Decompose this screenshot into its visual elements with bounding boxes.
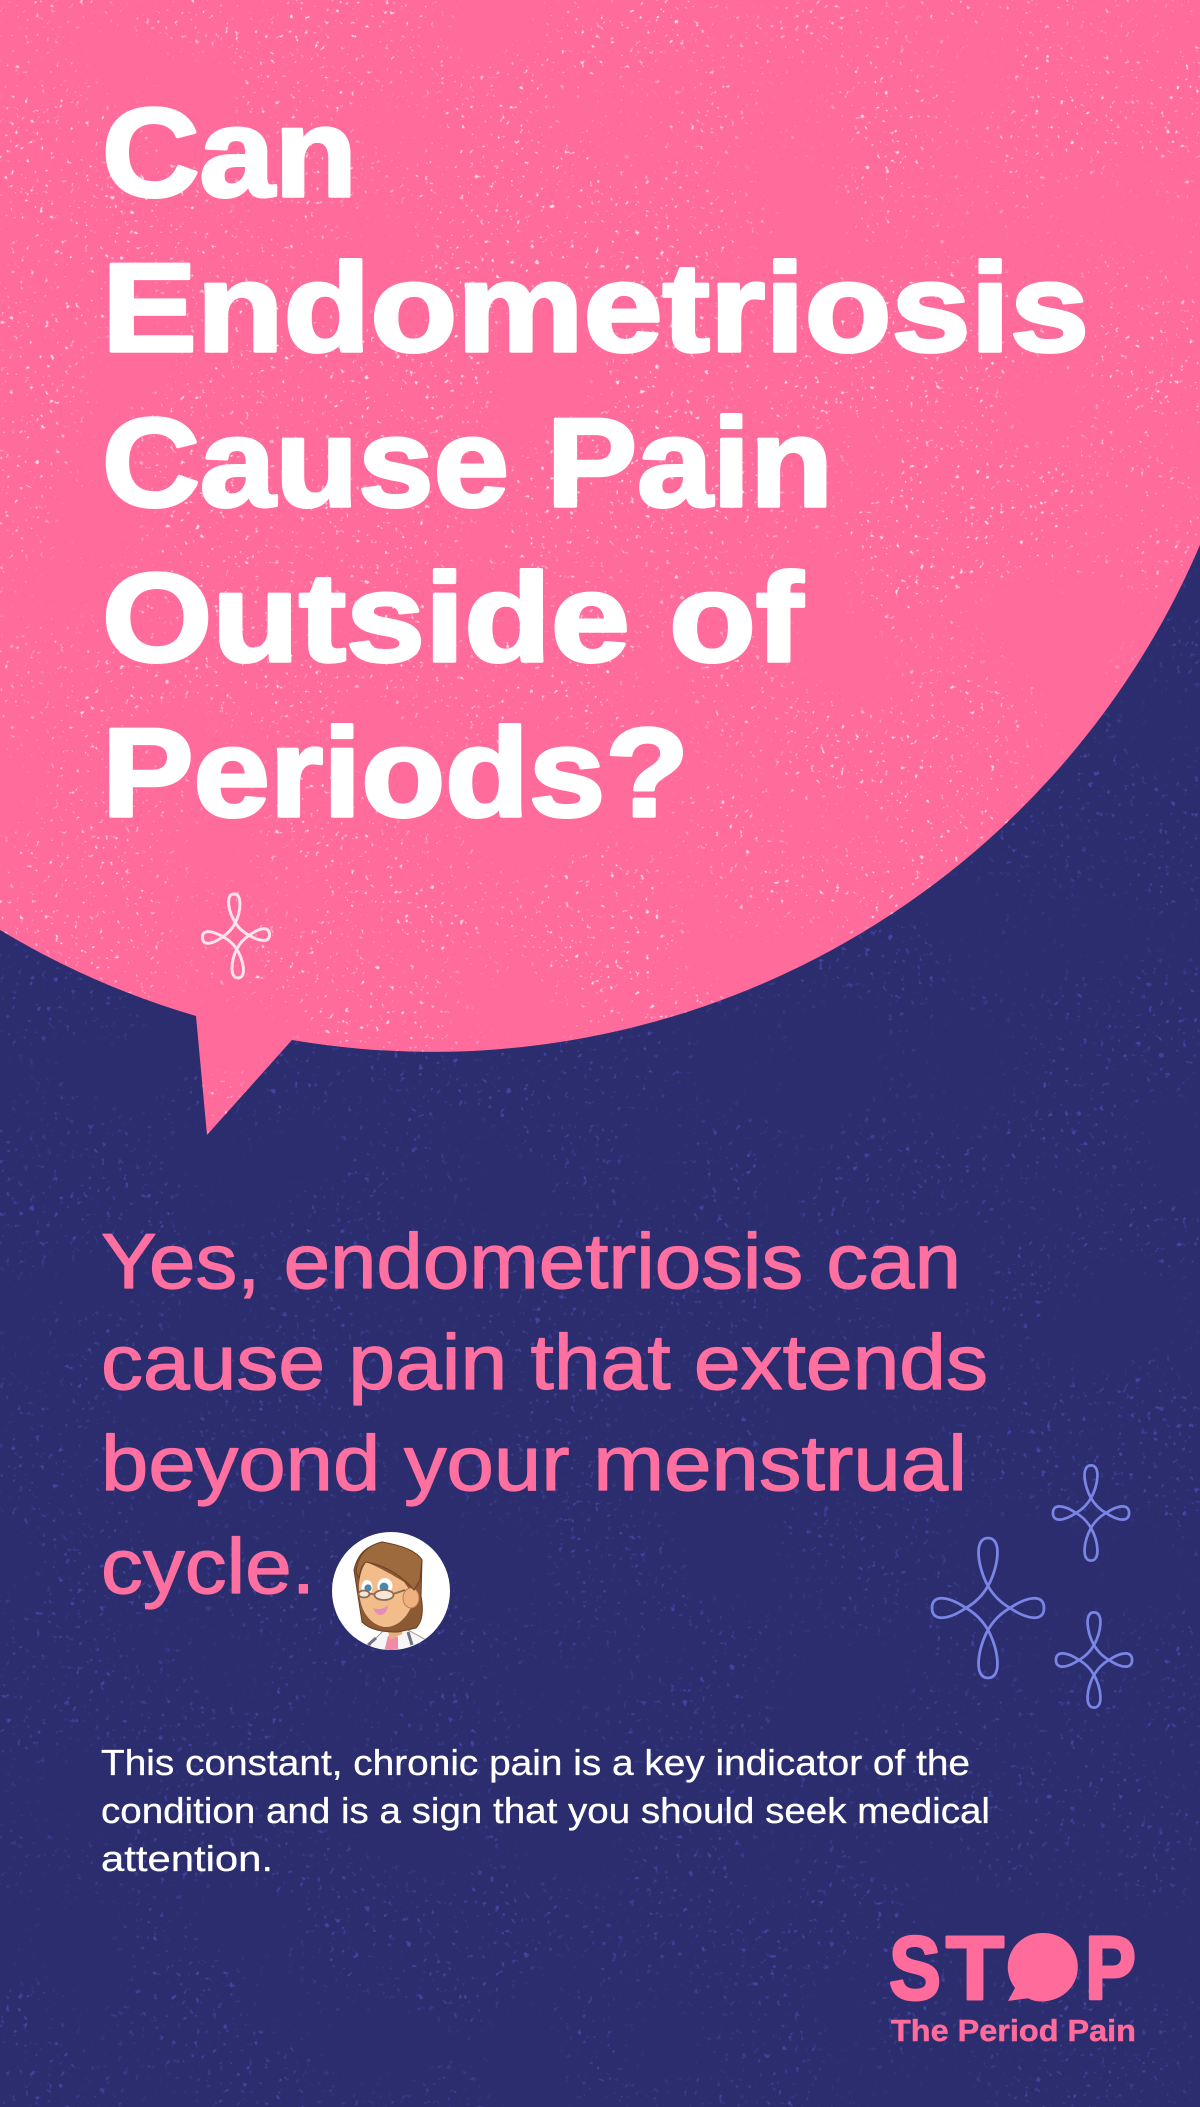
ear — [403, 1588, 419, 1608]
logo: Stop The Period Pain: P — [1085, 1919, 1136, 2019]
logo: Stop The Period Pain — [889, 1919, 1136, 2048]
mouth — [373, 1605, 388, 1615]
body text: condition and is a sign that you should seek medical — [101, 1790, 990, 1831]
icon: sparkle in bubble — [200, 892, 272, 980]
logo: Stop The Period Pain: The Period Pain — [891, 2013, 1136, 2048]
stethoscope straps — [368, 1632, 412, 1645]
hair fringe — [356, 1542, 422, 1590]
title — [102, 82, 1089, 843]
icon: doctor avatar — [332, 1532, 450, 1660]
hair back — [354, 1542, 422, 1632]
logo bubble — [1008, 1933, 1078, 2001]
title: Can — [102, 82, 357, 223]
logo: Stop The Period Pain: O — [1012, 1919, 1072, 2019]
answer text: cause pain that extends — [101, 1318, 988, 1406]
icon: sparkle top right — [1053, 1465, 1129, 1561]
neck — [388, 1632, 402, 1640]
icon: sparkle large — [932, 1538, 1044, 1678]
body text — [101, 1742, 990, 1879]
body text: attention. — [101, 1838, 273, 1879]
pink top — [384, 1636, 398, 1650]
body text: This constant, chronic pain is a key indicator of the — [101, 1742, 970, 1783]
title: Cause Pain — [102, 392, 833, 533]
title: Endometriosis — [102, 237, 1089, 378]
glasses — [358, 1590, 405, 1600]
answer text: Yes, endometriosis can — [101, 1217, 961, 1305]
answer text: beyond your menstrual — [101, 1419, 967, 1507]
face — [359, 1562, 414, 1627]
logo: Stop The Period Pain: S — [889, 1919, 941, 2019]
icon: sparkle bottom right — [1056, 1612, 1132, 1708]
answer text: cycle. — [101, 1522, 315, 1610]
doctor coat — [370, 1630, 425, 1650]
logo: Stop The Period Pain: T — [946, 1919, 1004, 2019]
speech bubble: pink — [0, 0, 1200, 1140]
answer text — [101, 1217, 988, 1610]
title: Outside of — [102, 547, 804, 688]
title: Periods? — [102, 702, 689, 843]
eyes — [362, 1578, 392, 1594]
